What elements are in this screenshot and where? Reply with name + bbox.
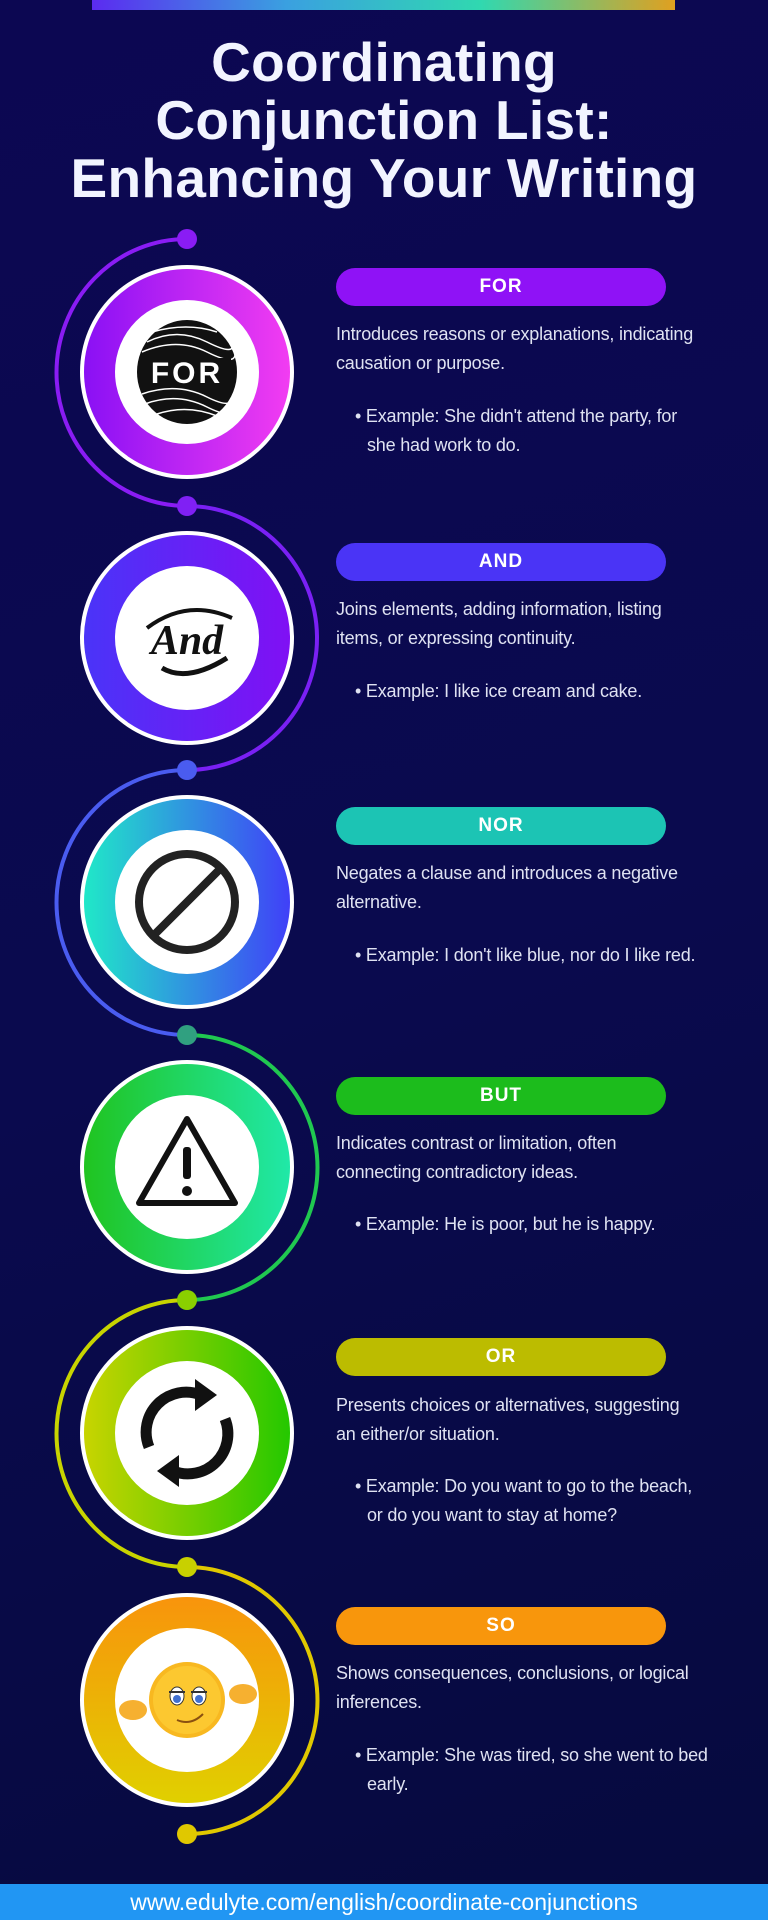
example: FOR: • Example: She didn't attend the party, for — [355, 406, 677, 426]
section: SO — [336, 1607, 708, 1794]
description: OR: an either/or situation. — [336, 1424, 500, 1444]
pill: BUT — [336, 1077, 666, 1115]
pill: FOR — [336, 268, 666, 306]
section: BUT — [336, 1077, 666, 1234]
icon: FOR circle — [80, 265, 294, 479]
footer url: www.edulyte.com/english/coordinate-conjunctions — [130, 1889, 638, 1915]
pill: BUT: BUT — [480, 1085, 522, 1106]
example: NOR: • Example: I don't like blue, nor do I like red. — [355, 945, 695, 965]
description: AND — [336, 599, 662, 648]
icon: NOR circle — [80, 795, 294, 1009]
description: SO: Shows consequences, conclusions, or logical — [336, 1663, 689, 1683]
example: FOR: she had work to do. — [367, 435, 520, 455]
pill: AND — [336, 543, 666, 581]
example: OR: or do you want to stay at home? — [367, 1505, 617, 1525]
section: NOR — [336, 807, 695, 965]
pill: OR — [336, 1338, 666, 1376]
title: Conjunction List: — [155, 89, 613, 151]
pill: NOR — [336, 807, 666, 845]
top gradient bar — [92, 0, 675, 10]
timeline graphic — [54, 229, 320, 1844]
pill: SO: SO — [486, 1615, 516, 1636]
connector arcs — [57, 239, 317, 1834]
icon: SO circle — [80, 1593, 294, 1807]
example: SO — [355, 1745, 708, 1794]
pill: AND: AND — [479, 551, 523, 572]
description: AND: items, or expressing continuity. — [336, 628, 575, 648]
icon: FOR circle: FOR — [151, 357, 223, 390]
description: SO: inferences. — [336, 1692, 422, 1712]
section: FOR — [336, 268, 693, 455]
example: BUT: • Example: He is poor, but he is happy. — [355, 1214, 655, 1234]
example: OR: • Example: Do you want to go to the beach, — [355, 1476, 692, 1496]
description: BUT: connecting contradictory ideas. — [336, 1162, 578, 1182]
section: AND — [336, 543, 666, 701]
example: SO: early. — [367, 1774, 408, 1794]
description: NOR: alternative. — [336, 892, 422, 912]
title — [71, 31, 697, 209]
pill: FOR: FOR — [479, 276, 523, 297]
pill: SO — [336, 1607, 666, 1645]
description: SO — [336, 1663, 689, 1712]
example: AND: • Example: I like ice cream and cake. — [355, 681, 642, 701]
icon: AND circle: And — [148, 618, 224, 664]
connector dots — [177, 229, 197, 1844]
example: OR — [355, 1476, 692, 1525]
title: Enhancing Your Writing — [71, 147, 697, 209]
pill: OR: OR — [486, 1346, 516, 1367]
description: AND: Joins elements, adding information, listing — [336, 599, 662, 619]
icon: BUT circle — [80, 1060, 294, 1274]
description: BUT — [336, 1133, 616, 1182]
example: FOR — [355, 406, 677, 455]
icon: AND circle — [80, 531, 294, 745]
icon: OR circle — [80, 1326, 294, 1540]
description: FOR: causation or purpose. — [336, 353, 505, 373]
description: NOR — [336, 863, 678, 912]
footer url — [0, 1884, 768, 1920]
description: OR — [336, 1395, 679, 1444]
description: OR: Presents choices or alternatives, suggesting — [336, 1395, 679, 1415]
section: OR — [336, 1338, 692, 1525]
pill: NOR: NOR — [478, 815, 524, 836]
description: BUT: Indicates contrast or limitation, often — [336, 1133, 616, 1153]
description: FOR — [336, 324, 693, 373]
example: SO: • Example: She was tired, so she went to bed — [355, 1745, 708, 1765]
title: Coordinating — [211, 31, 557, 93]
description: FOR: Introduces reasons or explanations, indicating — [336, 324, 693, 344]
description: NOR: Negates a clause and introduces a negative — [336, 863, 678, 883]
